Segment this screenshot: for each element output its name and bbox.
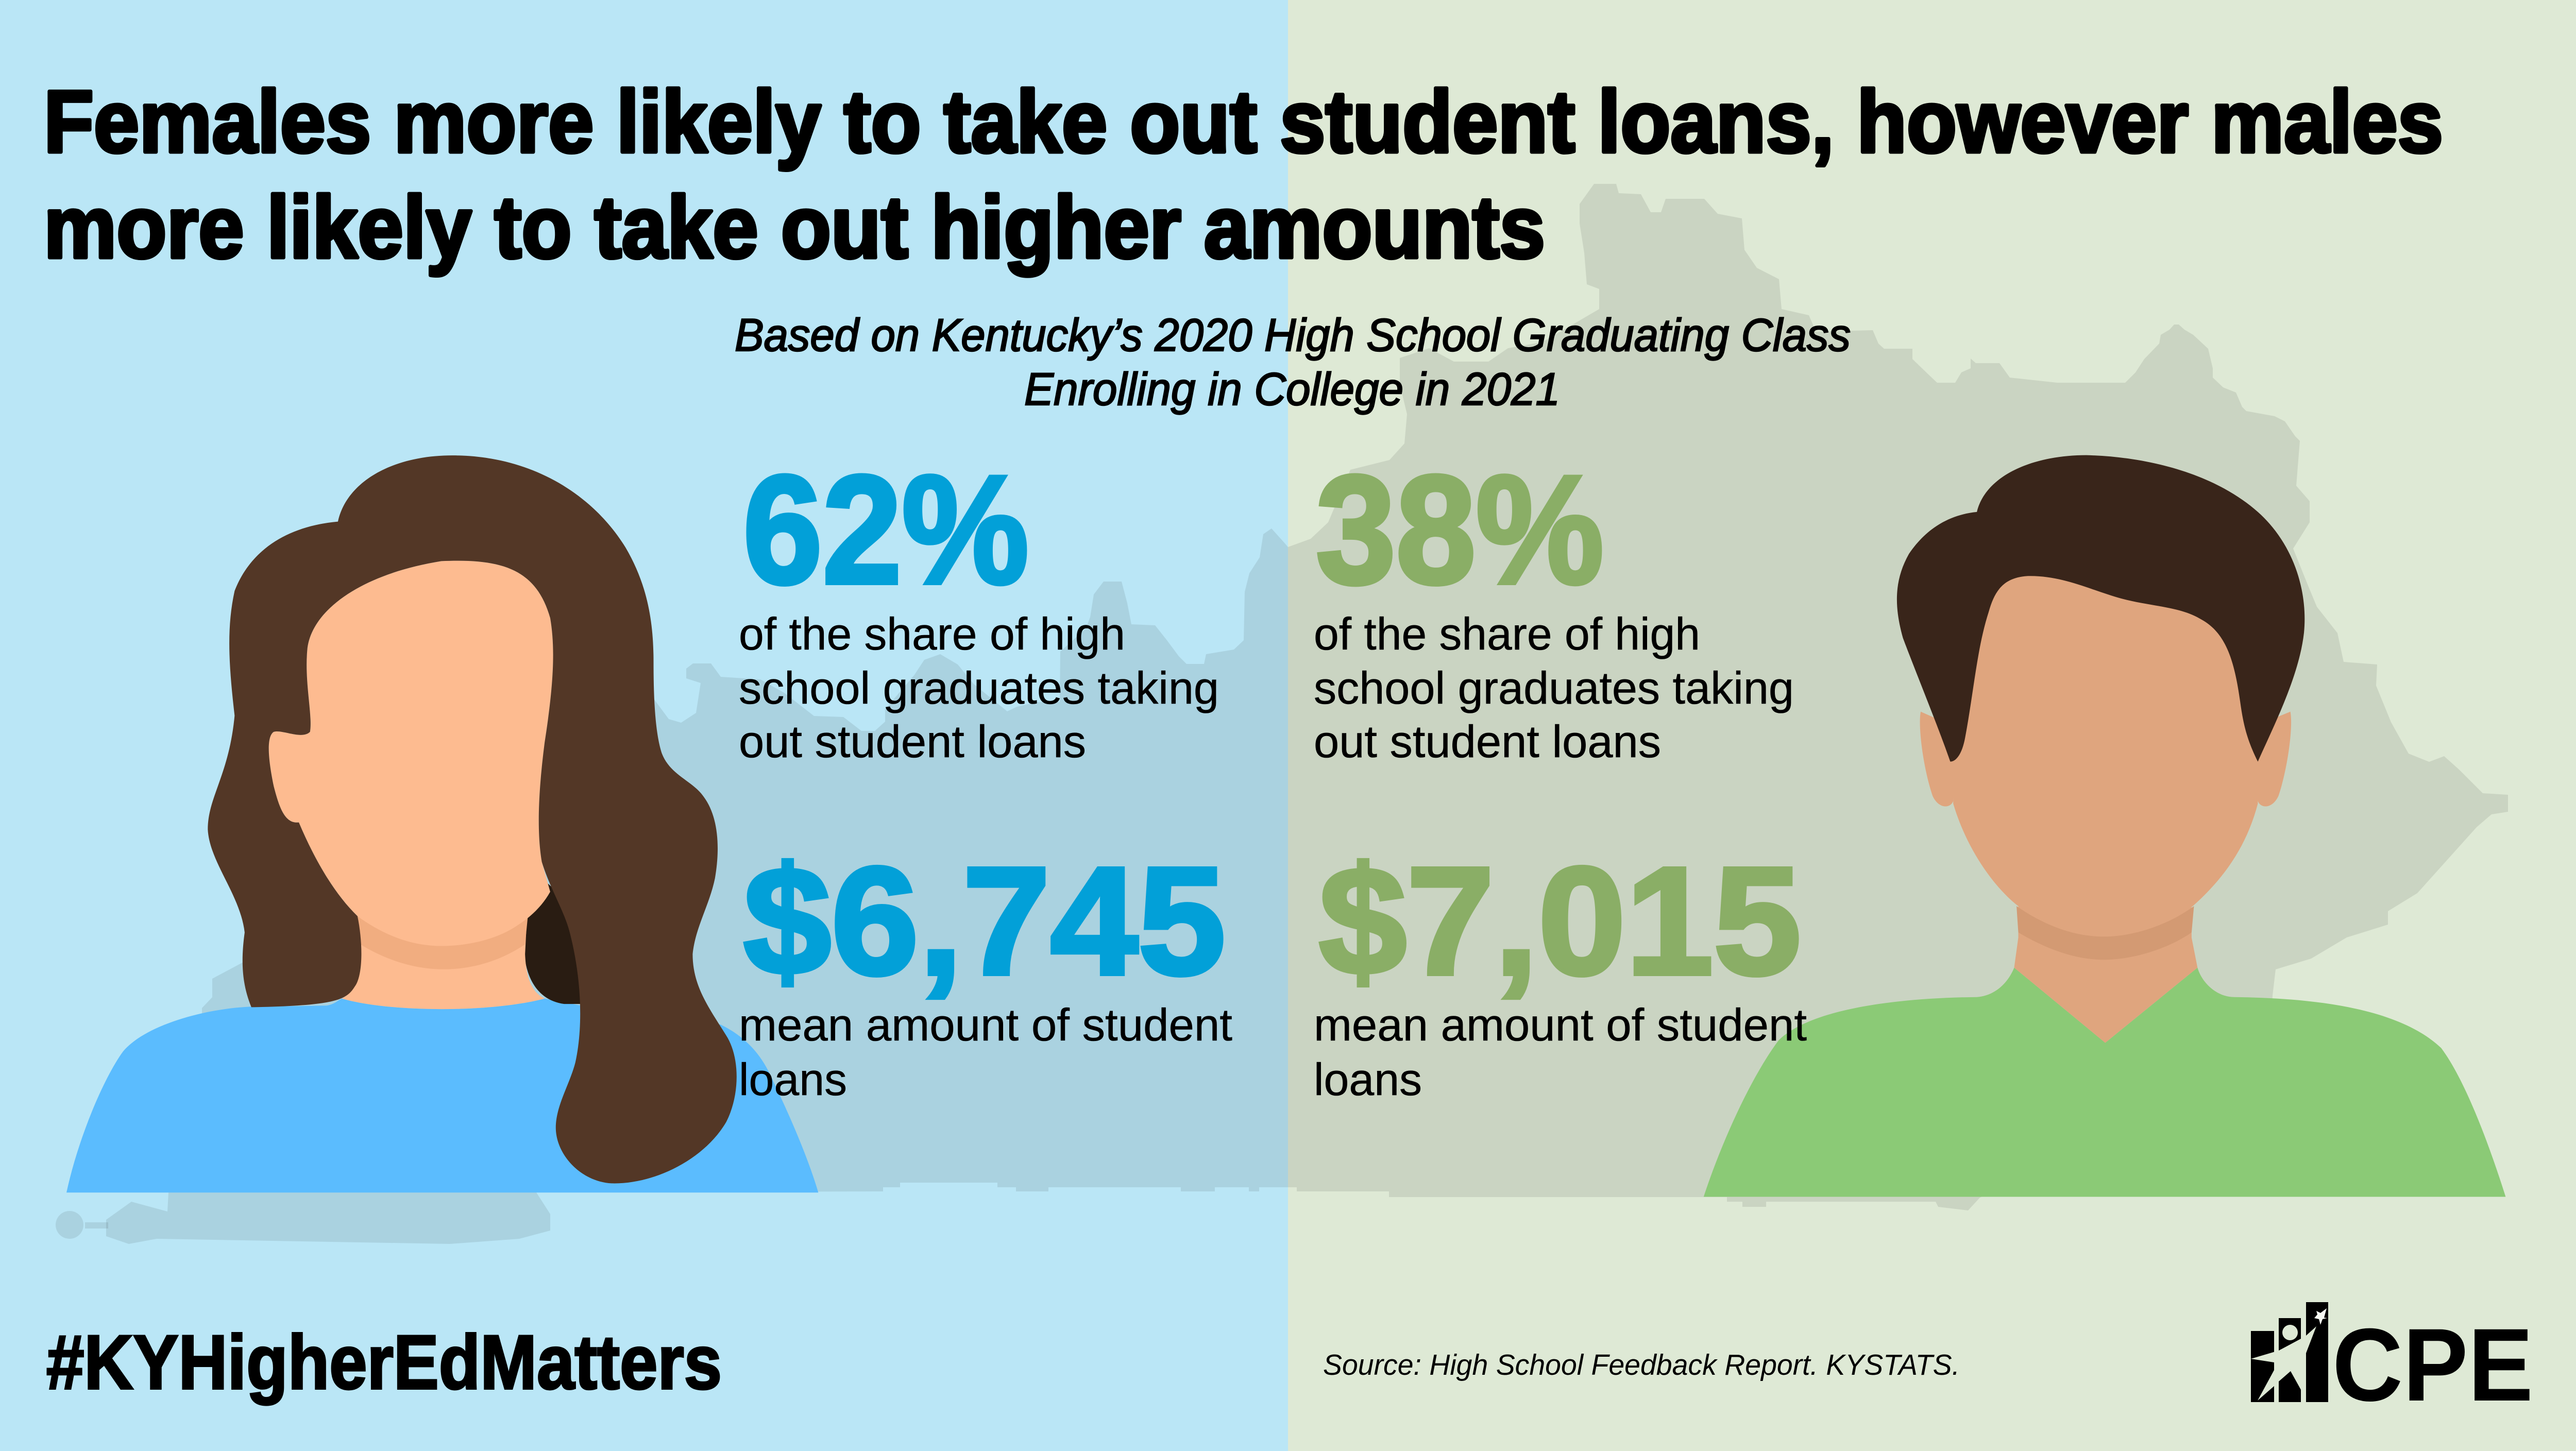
shirt: [66, 999, 818, 1192]
neck shadow: [2016, 906, 2194, 960]
logo: CPE: [2251, 1302, 2533, 1423]
text: male mean description: [1314, 999, 1807, 1105]
neck: [2014, 885, 2197, 1043]
text: female share description: [739, 608, 1219, 767]
panel: male background: [1288, 0, 2576, 1451]
logo bars: [2251, 1302, 2328, 1402]
logo star: [2314, 1308, 2327, 1325]
shirt: [1704, 968, 2505, 1197]
stat: $7,015 mean: $7,015: [1319, 835, 1801, 1007]
text: male share description: school graduates taking: [1314, 662, 1794, 713]
face: [269, 561, 553, 946]
hair: [1897, 455, 2304, 762]
text: female mean description: loans: [739, 1054, 847, 1105]
text: female share description: out student loans: [739, 716, 1086, 767]
subtitle: Enrolling in College in 2021: [1024, 363, 1560, 415]
text: female mean description: mean amount of student: [739, 999, 1232, 1050]
stat: 38% share: 38%: [1316, 443, 1604, 616]
title: more likely to take out higher amounts: [44, 178, 1545, 277]
logo figure: [2251, 1325, 2316, 1404]
icon: female avatar: [66, 455, 818, 1192]
text: female share description: of the share of high: [739, 608, 1125, 659]
title: Females more likely to take out student loans, however males: [44, 73, 2443, 171]
subtitle: [735, 309, 1851, 415]
title: [44, 73, 2443, 277]
subtitle: Based on Kentucky’s 2020 High School Graduating Class: [735, 309, 1851, 361]
stat: 62% share: 62%: [743, 443, 1029, 616]
source note: Source: High School Feedback Report. KYSTATS.: [1323, 1348, 1960, 1381]
neck shadow: [358, 916, 528, 969]
icon: male avatar: [1704, 455, 2505, 1197]
hashtag: #KYHigherEdMatters: [46, 1319, 722, 1405]
logo wordmark: CPE: [2332, 1307, 2533, 1423]
neck: [342, 900, 545, 1009]
text: female mean description: [739, 999, 1232, 1105]
map: Kentucky silhouette: [56, 184, 2508, 1244]
stat: $6,745 mean: $6,745: [743, 835, 1226, 1007]
panel: female background: [0, 0, 1288, 1451]
hair: [208, 455, 737, 1183]
text: male share description: [1314, 608, 1794, 767]
text: male mean description: loans: [1314, 1054, 1422, 1105]
dark hair behind neck: [524, 878, 603, 1004]
text: male share description: out student loans: [1314, 716, 1661, 767]
text: male share description: of the share of high: [1314, 608, 1700, 659]
ears: [1920, 712, 2291, 807]
face: [1953, 538, 2258, 936]
text: male mean description: mean amount of student: [1314, 999, 1807, 1050]
text: female share description: school graduates taking: [739, 662, 1219, 713]
